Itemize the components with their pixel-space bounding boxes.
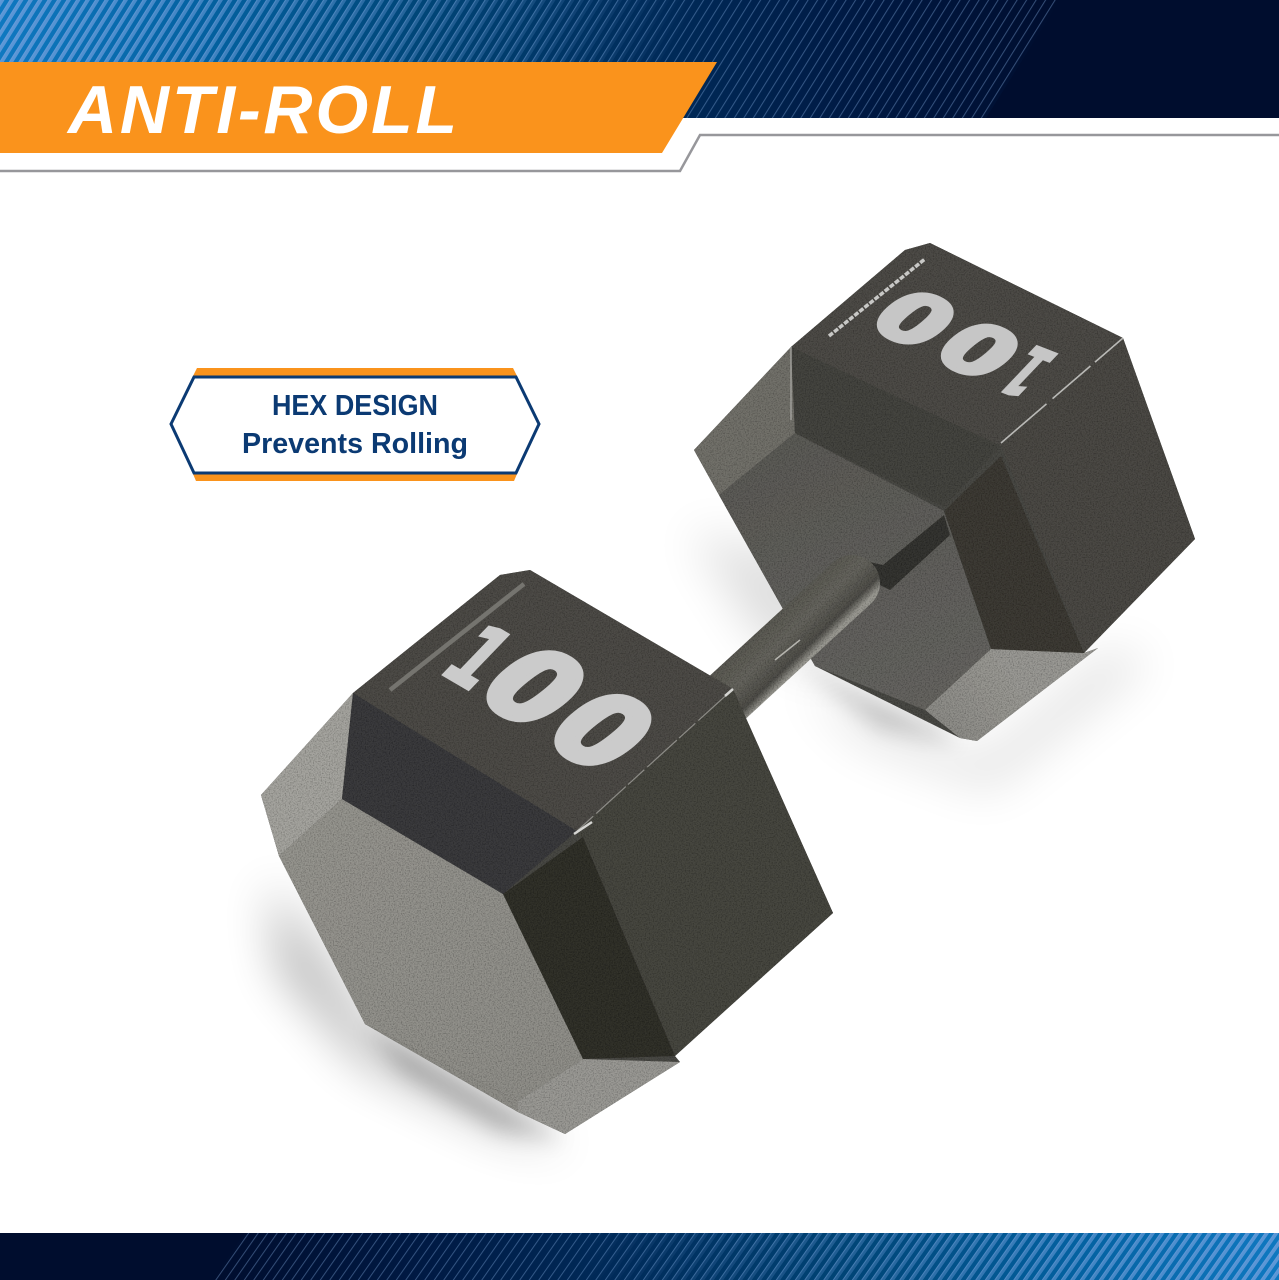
front weight number: 1	[421, 607, 534, 708]
grey outline below header	[0, 135, 1279, 171]
callout hexagon outline	[171, 377, 539, 473]
back weight number: 1	[982, 330, 1076, 410]
footer banner	[0, 1233, 1279, 1280]
callout heading: HEX DESIGN	[272, 390, 438, 422]
front weight number: 00	[451, 626, 684, 793]
back weight head	[694, 243, 1195, 741]
callout subheading: Prevents Rolling	[242, 428, 468, 460]
callout orange bottom bar	[193, 474, 517, 481]
front head highlight edges	[390, 584, 733, 834]
dumbbell	[261, 243, 1195, 1134]
back weight number: 00	[852, 273, 1045, 393]
back head highlight edges	[791, 259, 1123, 443]
handle	[728, 583, 852, 697]
dumbbell shadows	[270, 530, 1150, 1150]
callout orange top bar	[193, 368, 517, 376]
title banner: ANTI-ROLL	[66, 72, 457, 148]
header banner	[0, 0, 1279, 118]
title banner	[0, 62, 717, 153]
callout: hex design	[171, 368, 539, 481]
front weight head	[261, 570, 833, 1134]
